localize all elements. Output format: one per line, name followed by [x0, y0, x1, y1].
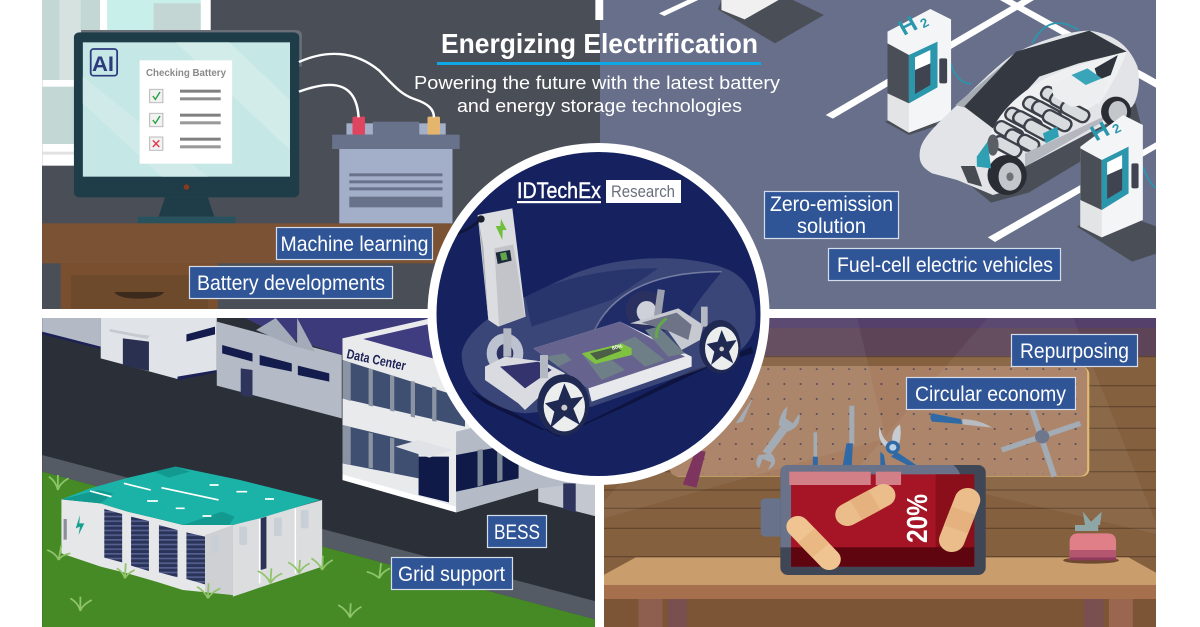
rear wheel: [1101, 97, 1131, 127]
logo: IDTechEx Research: [517, 178, 681, 203]
label: Fuel-cell electric vehicles: Fuel-cell electric vehicles: [837, 254, 1053, 277]
battery pack icon: 80%: [611, 343, 623, 352]
icon: camping burner: [1063, 512, 1119, 564]
kerb and grass: [42, 455, 597, 627]
label: Circular economy: Circular economy: [915, 383, 1066, 406]
battery pack icon: [582, 343, 632, 364]
pruning shears: [879, 424, 901, 447]
ghost car body: [462, 258, 756, 413]
label: Grid support: Grid support: [398, 563, 505, 586]
chassis: [533, 322, 692, 402]
cables: [299, 54, 434, 117]
knife: [930, 413, 962, 424]
label: BESS: BESS: [494, 521, 540, 544]
wood planks: [604, 356, 1156, 558]
checklist heading: Checking Battery: [146, 67, 226, 79]
rear wheel: [699, 320, 741, 373]
bandage: [835, 484, 896, 526]
hydrogen tanks: [991, 85, 1091, 159]
label: Grid support: [392, 558, 512, 590]
hammer: [683, 450, 706, 488]
label: Machine learning: Machine learning: [280, 233, 428, 256]
logo: IDTechEx Research: Research: [611, 182, 675, 201]
icon: battery energy storage units: [61, 467, 322, 597]
icon: hydrogen charger left: H: [894, 11, 921, 40]
ground shadow: [468, 347, 753, 437]
label: Battery developments: Battery developments: [197, 272, 385, 295]
charging post: [478, 208, 526, 327]
data center building: [342, 319, 597, 517]
label: Repurposing: Repurposing: [1020, 340, 1129, 363]
light beams: [604, 318, 1161, 535]
car shadow: [968, 103, 1141, 203]
table: [604, 557, 1157, 627]
screwdrivers: [814, 432, 817, 457]
icon: hydrogen charger right: 2: [1110, 120, 1123, 137]
icon: damaged battery 20%: [761, 465, 986, 575]
central circle: EV skateboard: [428, 143, 770, 485]
icon: fuel cell car: [920, 31, 1139, 195]
rear back wheel: [626, 291, 664, 329]
warehouse buildings: [42, 318, 429, 418]
label: Zero-emission solution: [764, 192, 898, 238]
label: BESS: [488, 516, 546, 548]
window: [42, 0, 211, 166]
label: Repurposing: [1012, 334, 1138, 366]
icon: hydrogen charger left: 2: [917, 15, 931, 31]
front back wheel: [487, 333, 523, 373]
icon: hydrogen charger left: [885, 9, 951, 135]
top charger base: [718, 0, 824, 43]
label: Machine learning: [276, 228, 432, 260]
icon: hydrogen charger right: [1077, 115, 1157, 262]
data center sign: Data Center: [345, 346, 408, 374]
title: Energizing Electrification: [441, 28, 758, 59]
panel: data center BESS: [40, 315, 597, 627]
panel: AI battery testing: [40, 0, 604, 310]
panel: repurposing workshop: [600, 315, 1161, 627]
tools on pegboard: [683, 397, 1080, 488]
label: Zero-emission solution: solution: [797, 215, 866, 238]
front wheel: [537, 374, 589, 436]
gutter notch: [595, 0, 600, 20]
title block band: [590, 20, 610, 127]
fuel cell stack: [1052, 78, 1102, 106]
icon: hydrogen charger right: H: [1086, 116, 1114, 146]
desk: [42, 223, 453, 309]
label: Zero-emission solution: Zero-emission: [770, 193, 893, 216]
grass tufts: [47, 475, 390, 618]
panel: hydrogen fuel cell vehicle: [600, 0, 1157, 310]
parking lines: [659, 0, 1157, 242]
spanner: [756, 407, 800, 470]
cross wrench: [1002, 410, 1080, 477]
label: Battery developments: [190, 266, 392, 298]
subtitle: and energy storage technologies: [457, 95, 742, 116]
front subframe: [485, 357, 565, 410]
bandage: [935, 485, 984, 555]
label: Circular economy: [906, 378, 1076, 410]
subtitle: Powering the future with the latest battery: [414, 72, 781, 93]
front wheel: [987, 155, 1027, 195]
title underline: [437, 62, 761, 65]
hoses: [951, 23, 1157, 188]
pegboard: [670, 366, 1089, 477]
battery percent: 20%: [902, 494, 934, 543]
AI badge text: AI: [92, 53, 114, 76]
subtitle: [414, 72, 781, 116]
label: Fuel-cell electric vehicles: [828, 248, 1060, 280]
logo: IDTechEx Research: IDTechEx: [517, 178, 601, 203]
icon: computer monitor: [74, 30, 302, 223]
icon: car battery: [332, 117, 460, 223]
bandage: [786, 516, 841, 570]
